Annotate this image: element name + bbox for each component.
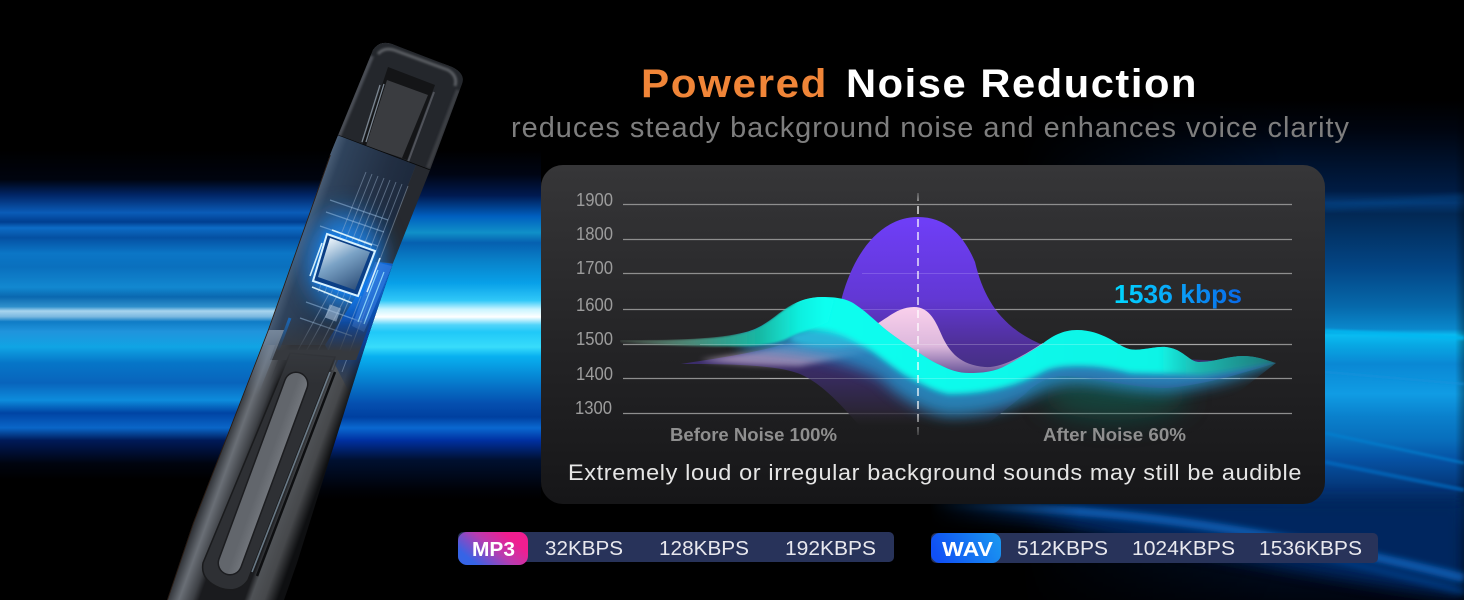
MP3 bitrate bar: 192KBPS bbox=[785, 538, 876, 560]
title bbox=[641, 62, 1198, 106]
area: purple low shadow bbox=[681, 343, 1276, 426]
y axis labels: 1700 bbox=[576, 258, 613, 278]
pale band under left lobe bbox=[700, 335, 875, 366]
WAV bitrate bar: 1536KBPS bbox=[1259, 538, 1362, 560]
chip glow frame and die bbox=[310, 230, 380, 303]
value callout: 1536 kbps bbox=[1114, 279, 1242, 309]
y axis labels: 1400 bbox=[576, 364, 613, 384]
title: Powered bbox=[641, 62, 828, 106]
divider dashed line bbox=[917, 193, 919, 436]
title: Noise Reduction bbox=[846, 62, 1198, 106]
grid lines bbox=[623, 204, 1292, 414]
left edge glass line bbox=[167, 155, 330, 600]
teal glow below curve bbox=[1043, 372, 1187, 420]
after label: After Noise 60% bbox=[1043, 425, 1186, 445]
before label: Before Noise 100% bbox=[670, 425, 837, 445]
MP3 bitrate bar: 128KBPS bbox=[659, 538, 749, 560]
y axis labels: 1800 bbox=[576, 224, 613, 244]
subtitle: reduces steady background noise and enhances voice clarity bbox=[511, 112, 1350, 144]
y axis labels: 1300 bbox=[575, 398, 612, 418]
y axis labels: 1900 bbox=[576, 190, 613, 210]
WAV bitrate bar: WAV bbox=[942, 539, 994, 561]
area: pink mid curve bbox=[868, 307, 1043, 384]
panel: noise reduction chart bbox=[541, 165, 1325, 504]
MP3 bitrate bar: 32KBPS bbox=[545, 538, 623, 560]
y axis labels: 1600 bbox=[576, 295, 613, 315]
faint grid lines across purple bbox=[842, 274, 1000, 310]
area: cyan after noise with soft lower edge bbox=[620, 280, 1276, 416]
WAV bitrate bar bbox=[931, 533, 1378, 563]
faint grid lines across cyan bbox=[700, 344, 1270, 378]
lower body with long oval grip bbox=[203, 350, 342, 590]
transparent mid section bbox=[237, 135, 432, 395]
product: voice recorder pen with see-through chip section bbox=[167, 43, 463, 600]
y axis labels bbox=[575, 190, 613, 418]
WAV bitrate bar: 1024KBPS bbox=[1132, 538, 1235, 560]
MP3 bitrate bar bbox=[458, 532, 894, 565]
WAV bitrate bar: 512KBPS bbox=[1017, 538, 1108, 560]
y axis labels: 1500 bbox=[576, 329, 613, 349]
MP3 bitrate bar: MP3 bbox=[472, 539, 515, 561]
disclaimer: Extremely loud or irregular background sounds may still be audible bbox=[568, 460, 1302, 485]
top cap with recessed panel bbox=[330, 43, 463, 170]
area: purple before noise bbox=[835, 217, 1043, 372]
